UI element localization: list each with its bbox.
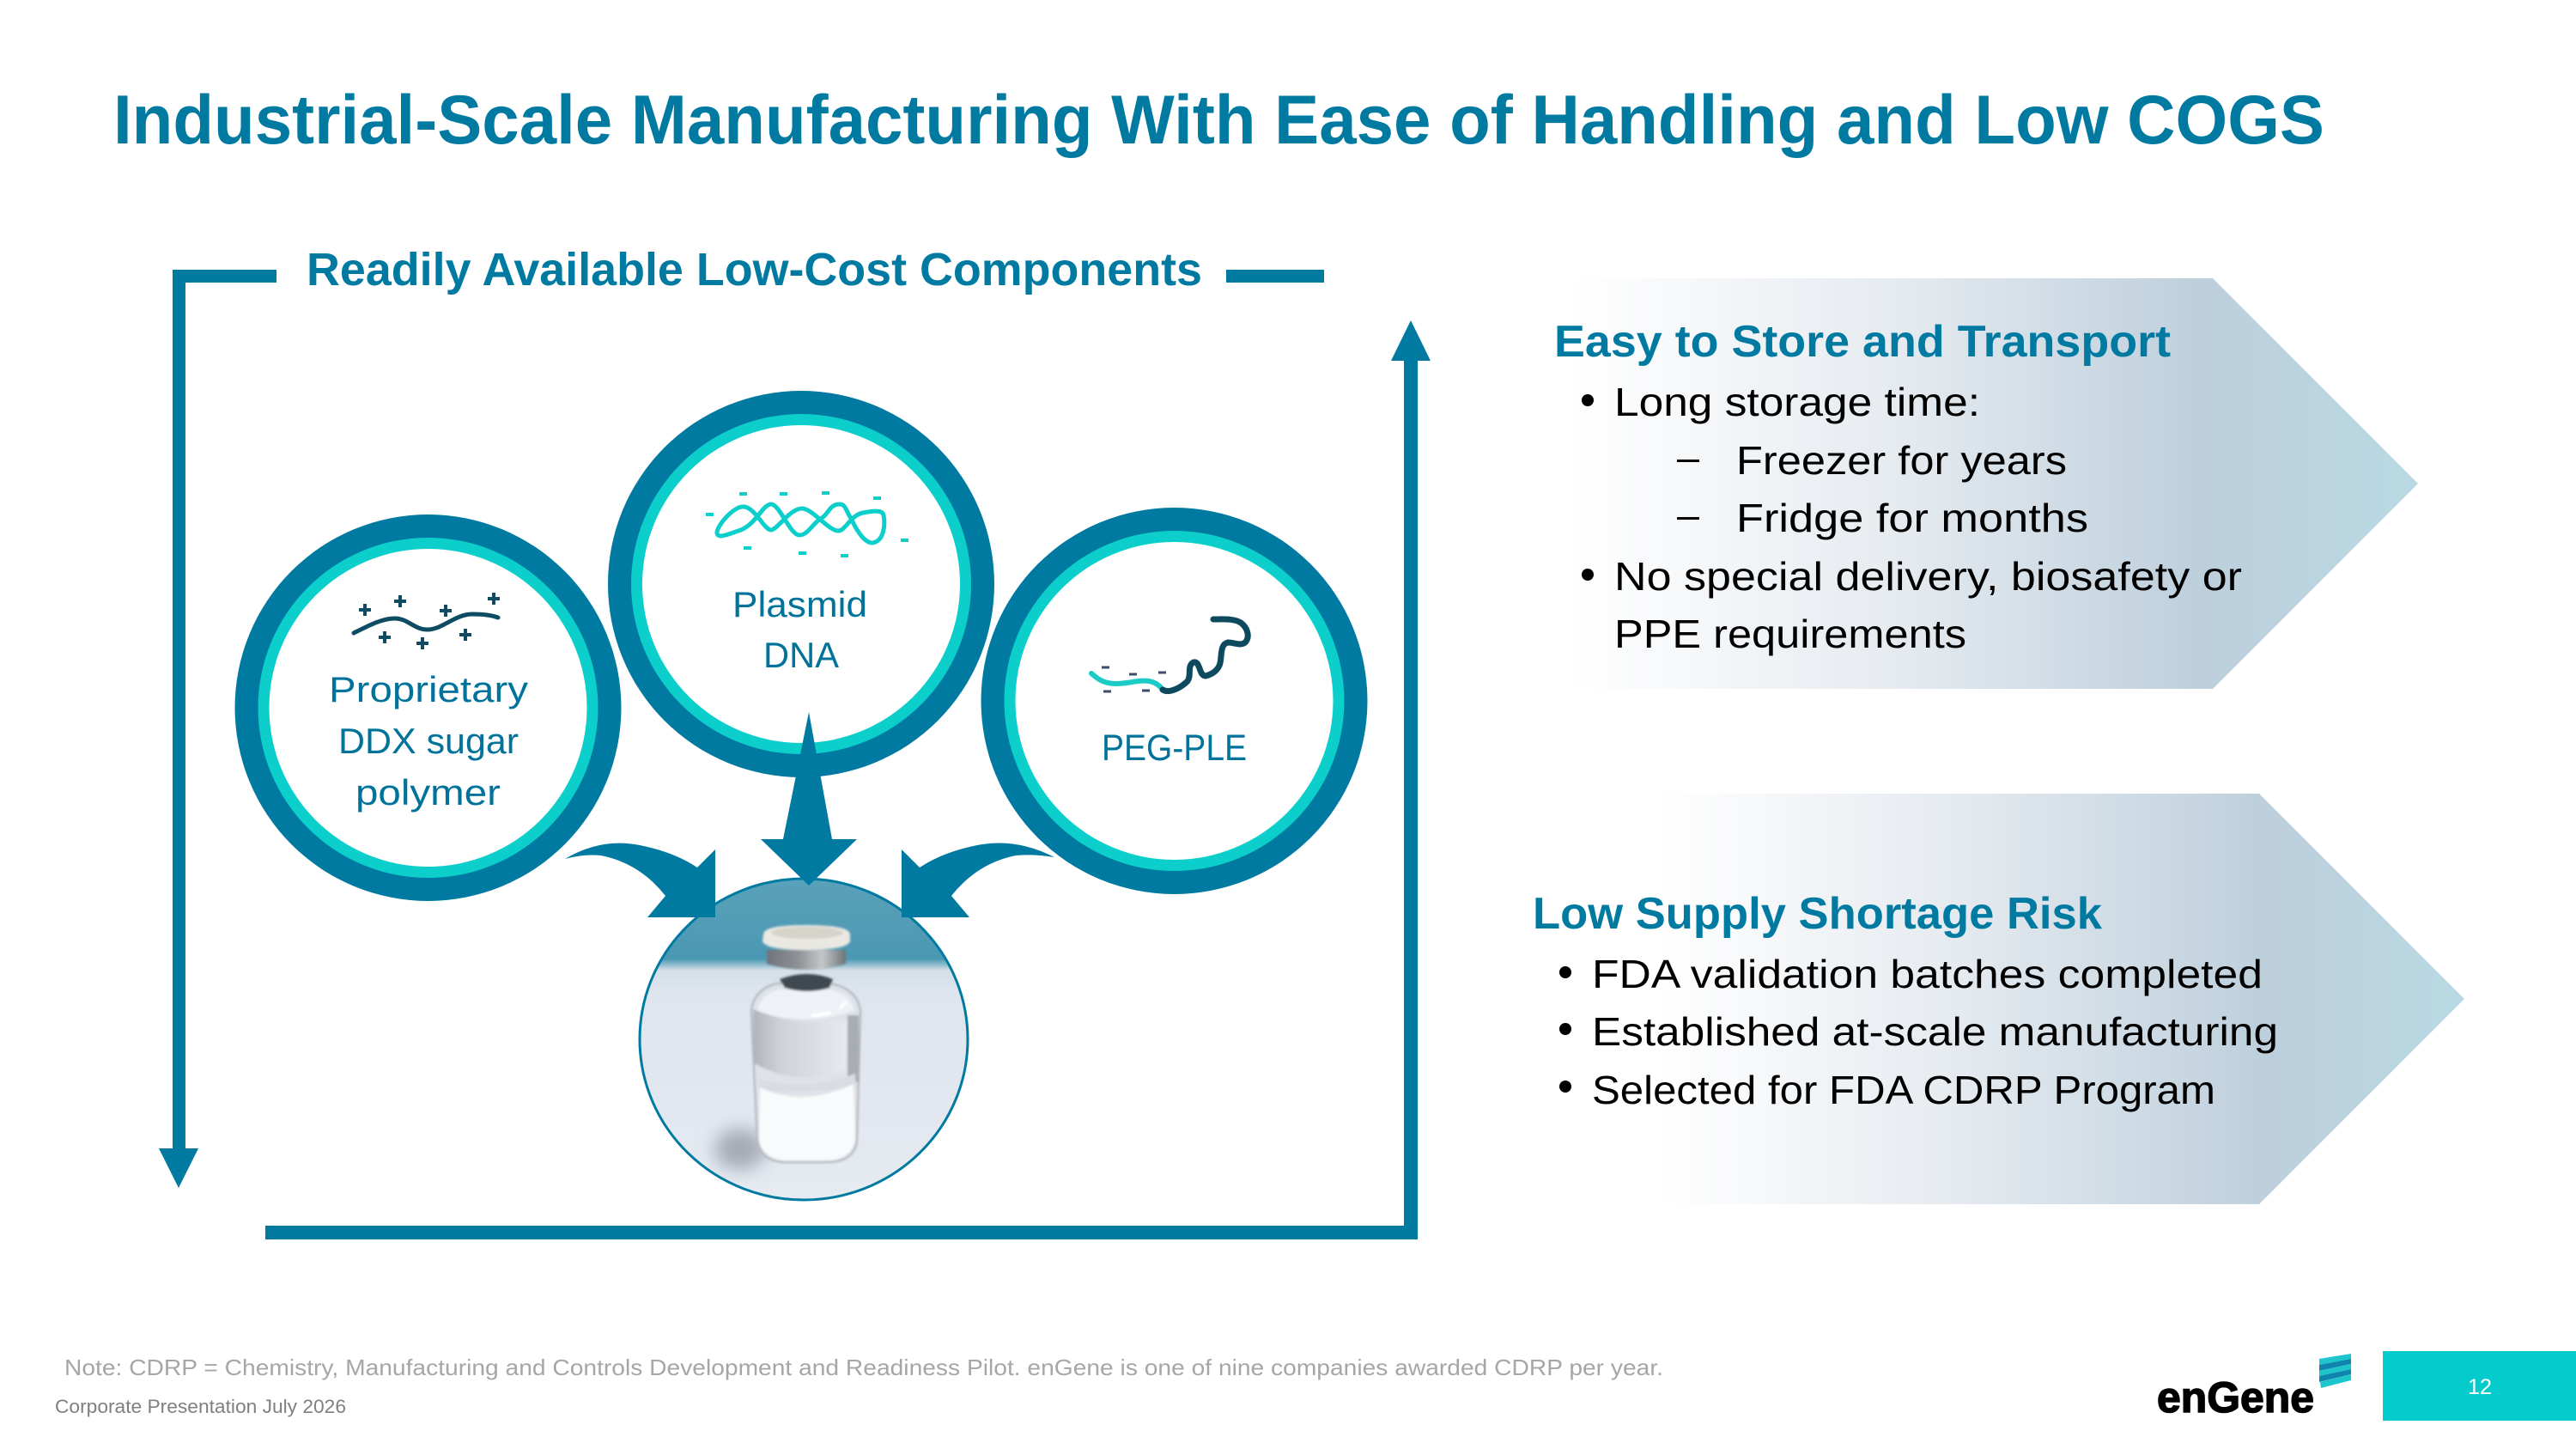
- label: PEG-PLE: [1102, 728, 1247, 769]
- label: DDX sugar: [338, 721, 519, 761]
- top right bar: [1226, 270, 1324, 283]
- bullet list: PPE requirements: [1614, 612, 1966, 656]
- label: Proprietary: [329, 669, 528, 709]
- chevron background: [1631, 794, 2464, 1204]
- arrow: plasmid DNA to vial: [761, 712, 857, 886]
- footnote: Note: CDRP = Chemistry, Manufacturing and Controls Development and Readiness Pilot. enGene is one of nine companies awarded CDRP per year.: [64, 1355, 1663, 1380]
- icon: DNA helix with negative charges: [706, 493, 908, 556]
- label: Plasmid: [732, 584, 867, 624]
- bullet list: FDA validation batches completed: [1592, 952, 2263, 996]
- arrow: right component to vial: [902, 843, 1054, 917]
- panel: low supply shortage risk: [1533, 794, 2464, 1204]
- panel: readily available low-cost components: [159, 244, 1431, 1239]
- bullet list: Established at-scale manufacturing: [1592, 1009, 2278, 1054]
- label: DNA: [763, 635, 839, 675]
- arrow: left bracket pointing down: [159, 270, 276, 1188]
- panel: easy to store and transport: [1554, 278, 2418, 689]
- icon: PEG-PLE chain: [1091, 619, 1248, 691]
- logo: enGene: enGene: [2157, 1373, 2314, 1422]
- component circle: proprietary DDX sugar polymer: [235, 514, 622, 901]
- arrow: left component to vial: [565, 843, 715, 917]
- bullet list: No special delivery, biosafety or: [1614, 554, 2242, 599]
- arrow: bottom and right bracket pointing up: [265, 320, 1431, 1239]
- label: polymer: [355, 772, 501, 813]
- bullet list: Long storage time:: [1614, 380, 1980, 424]
- page number: [2383, 1351, 2576, 1421]
- heading: components: Readily Available Low-Cost Components: [307, 244, 1202, 295]
- bullet list: Selected for FDA CDRP Program: [1592, 1068, 2215, 1112]
- heading: Easy to Store and Transport: [1554, 317, 2171, 367]
- heading: Low Supply Shortage Risk: [1533, 889, 2102, 939]
- icon: polymer strand with positive charges: [354, 593, 500, 649]
- bullet list: [1559, 952, 2278, 1112]
- footer date: Corporate Presentation July 2026: [55, 1396, 346, 1417]
- logo: enGene: [2157, 1354, 2351, 1422]
- vial photo circle: [640, 879, 968, 1200]
- bullet list: [1582, 380, 2242, 656]
- component circle: PEG-PLE: [981, 508, 1367, 894]
- page number: 12: [2468, 1375, 2492, 1399]
- component circle: plasmid DNA: [608, 391, 994, 777]
- chevron background: [1554, 278, 2418, 689]
- bullet list: Fridge for months: [1736, 496, 2088, 540]
- bullet list: Freezer for years: [1736, 438, 2067, 483]
- title: Industrial-Scale Manufacturing With Ease of Handling and Low COGS: [113, 82, 2324, 159]
